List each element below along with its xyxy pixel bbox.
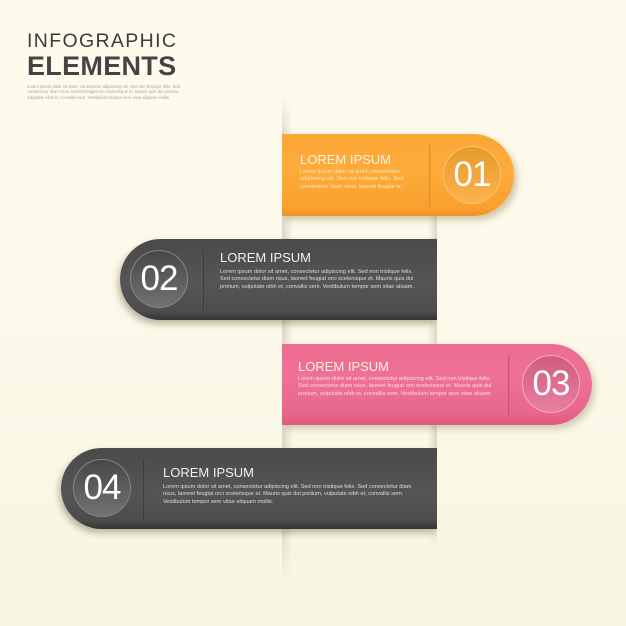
- text 02: Sed consectetur diam risus, laoreet feugiat orci scelerisque et. Mauris quis dui: [220, 276, 413, 282]
- intro text: vulputate nibh et, convallis sem. Vestibulum tempor sem vitae aliquam mollis.: [27, 95, 170, 100]
- panel: step 02: [120, 239, 437, 320]
- text 03: pretium, vulputate nibh et, convallis sem. Vestibulum tempor sem vitae aliuam.: [298, 391, 492, 397]
- panel: step 04: [61, 448, 437, 529]
- heading 03: LOREM IPSUM: [298, 359, 389, 374]
- heading: infographic: INFOGRAPHIC: [27, 30, 177, 52]
- text 02: [220, 269, 414, 289]
- panel: step 03: [282, 344, 592, 425]
- text 01: adipiscing elit. Sed non tristique felis. Sed: [300, 176, 403, 182]
- text 04: risus, laoreet feugiat orci scelerisque et. Mauris quis dui pretium, vulputate nibh et, convallis sem.: [163, 491, 403, 497]
- text 02: pretium, vulputate nibh et, convallis sem. Vestibulum tempor sem vitae aliuam.: [220, 284, 414, 290]
- text 04: Vestibulum tempor sem vitae aliquam mollis.: [163, 499, 273, 505]
- number badge 04: [73, 459, 131, 517]
- number badge 03: [522, 355, 580, 413]
- text 03: Sed consectetur diam risus, laoreet feugiat orci scelerisque et. Mauris quis dui: [298, 383, 491, 389]
- title: [27, 30, 180, 100]
- text 03: Lorem ipsum dolor sit amet, consectetur adipiscing elit. Sed non tristique felis.: [298, 376, 491, 382]
- number badge 01: [443, 146, 501, 204]
- text 01: consectetur diam risus, laoreet feugiat or.: [300, 184, 402, 190]
- intro text: Lorem ipsum dolor sit amet, consectetur adipiscing elit. Sed non tristique felis. Sed: [27, 84, 180, 89]
- text 03: [298, 376, 492, 396]
- intro text: consectetur diam risus, laoreet feugiat orci scelerisque et. Mauris quis dui pretium,: [27, 89, 179, 94]
- text 01: [300, 169, 403, 189]
- number badge 02: 02: [141, 259, 177, 298]
- number badge 03: 03: [533, 364, 569, 403]
- heading 04: LOREM IPSUM: [163, 465, 254, 480]
- divider 04: [143, 459, 145, 521]
- number badge 02: [130, 250, 188, 308]
- number badge 01: 01: [454, 155, 490, 194]
- heading: elements: ELEMENTS: [27, 51, 176, 81]
- divider 03: [508, 355, 510, 417]
- text 04: [163, 484, 412, 504]
- heading 01: LOREM IPSUM: [300, 152, 391, 167]
- text 01: Lorem ipsum dolor sit amet, consectetur: [300, 169, 400, 175]
- fold shadow: left vertical crease: [282, 104, 290, 571]
- intro text: [27, 84, 180, 100]
- text 02: Lorem ipsum dolor sit amet, consectetur adipiscing elit. Sed non tristique felis.: [220, 269, 413, 275]
- divider 01: [429, 145, 431, 207]
- number badge 04: 04: [84, 468, 120, 507]
- fold shadow: right vertical crease: [430, 216, 437, 542]
- panel: step 01: [282, 134, 514, 216]
- text 04: Lorem ipsum dolor sit amet, consectetur adipiscing elit. Sed non tristique felis. Sed consectetur diam: [163, 484, 411, 490]
- divider 02: [203, 250, 205, 312]
- heading 02: LOREM IPSUM: [220, 250, 311, 265]
